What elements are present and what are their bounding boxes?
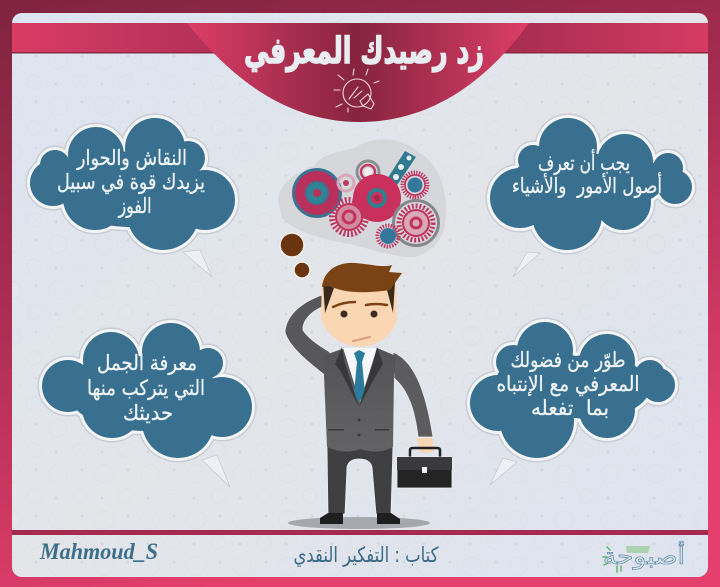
gear: lower right <box>394 200 438 246</box>
briefcase <box>397 448 452 488</box>
cloud text: معرفة الجمل <box>97 351 197 375</box>
title: زد رصيدك المعرفي <box>244 31 484 72</box>
tail <box>490 458 517 485</box>
footer author: Mahmoud_S <box>39 539 158 564</box>
gear: large left <box>292 168 342 218</box>
hand <box>417 438 434 453</box>
tail <box>183 250 212 277</box>
pockets and buttons <box>328 418 389 436</box>
right arm <box>393 352 433 437</box>
footer book title: كتاب : التفكير النقدي <box>294 543 438 567</box>
cloud text: يجب أن تعرف <box>538 149 630 175</box>
logo crown <box>626 546 650 553</box>
logo sparks <box>603 547 621 572</box>
gear: small pink <box>338 175 354 191</box>
header band <box>12 23 708 54</box>
footer divider <box>12 530 708 535</box>
cloud text <box>512 149 662 198</box>
title banner <box>187 23 529 122</box>
mouth <box>353 337 370 341</box>
raised arm <box>285 295 330 376</box>
speech cloud: bottom right <box>470 322 675 485</box>
jacket <box>324 348 396 452</box>
gear: bottom small <box>378 226 398 246</box>
gear: lower left <box>332 200 366 234</box>
man figure <box>285 263 452 524</box>
cloud text: بما تفعله <box>531 396 609 420</box>
gear: right teeth <box>403 173 427 197</box>
cloud text: النقاش والحوار <box>76 146 187 170</box>
eyebrows <box>333 302 387 307</box>
legs <box>327 446 393 514</box>
cloud text: المعرفي مع الإنتباه <box>496 372 640 396</box>
floor shadow <box>288 517 430 529</box>
icon: light bulb <box>334 69 379 112</box>
gear: top grey <box>357 161 379 183</box>
sideburns <box>323 282 395 313</box>
cloud text: التي يتركب منها <box>87 376 205 400</box>
cloud text: أصول الأمور والأشياء <box>512 172 662 198</box>
shirt <box>343 348 377 402</box>
lapels <box>335 347 383 407</box>
cloud text <box>496 348 640 420</box>
hair <box>322 263 402 292</box>
tie <box>354 350 365 402</box>
eyes <box>340 310 378 318</box>
cloud text <box>87 351 205 425</box>
logo: أصبوحة <box>603 541 685 570</box>
thought bubbles <box>280 233 310 278</box>
brain with gears <box>278 139 446 257</box>
gear: large centre <box>353 174 401 222</box>
cloud text: يزيدك قوة في سبيل <box>57 170 205 194</box>
tail <box>513 252 540 277</box>
neck and face <box>321 278 397 347</box>
cloud text: حديثك <box>123 401 173 425</box>
brain silhouette <box>278 139 446 257</box>
speech cloud: bottom left <box>42 323 252 487</box>
cloud text: طوّر من فضولك <box>510 348 626 372</box>
speech cloud: top left <box>30 118 235 277</box>
cloud text: الفوز <box>118 194 152 218</box>
gear arm <box>375 151 416 203</box>
speech cloud: top right <box>490 118 692 277</box>
tail <box>202 455 230 487</box>
shoes <box>320 513 400 524</box>
cloud text <box>57 146 205 218</box>
